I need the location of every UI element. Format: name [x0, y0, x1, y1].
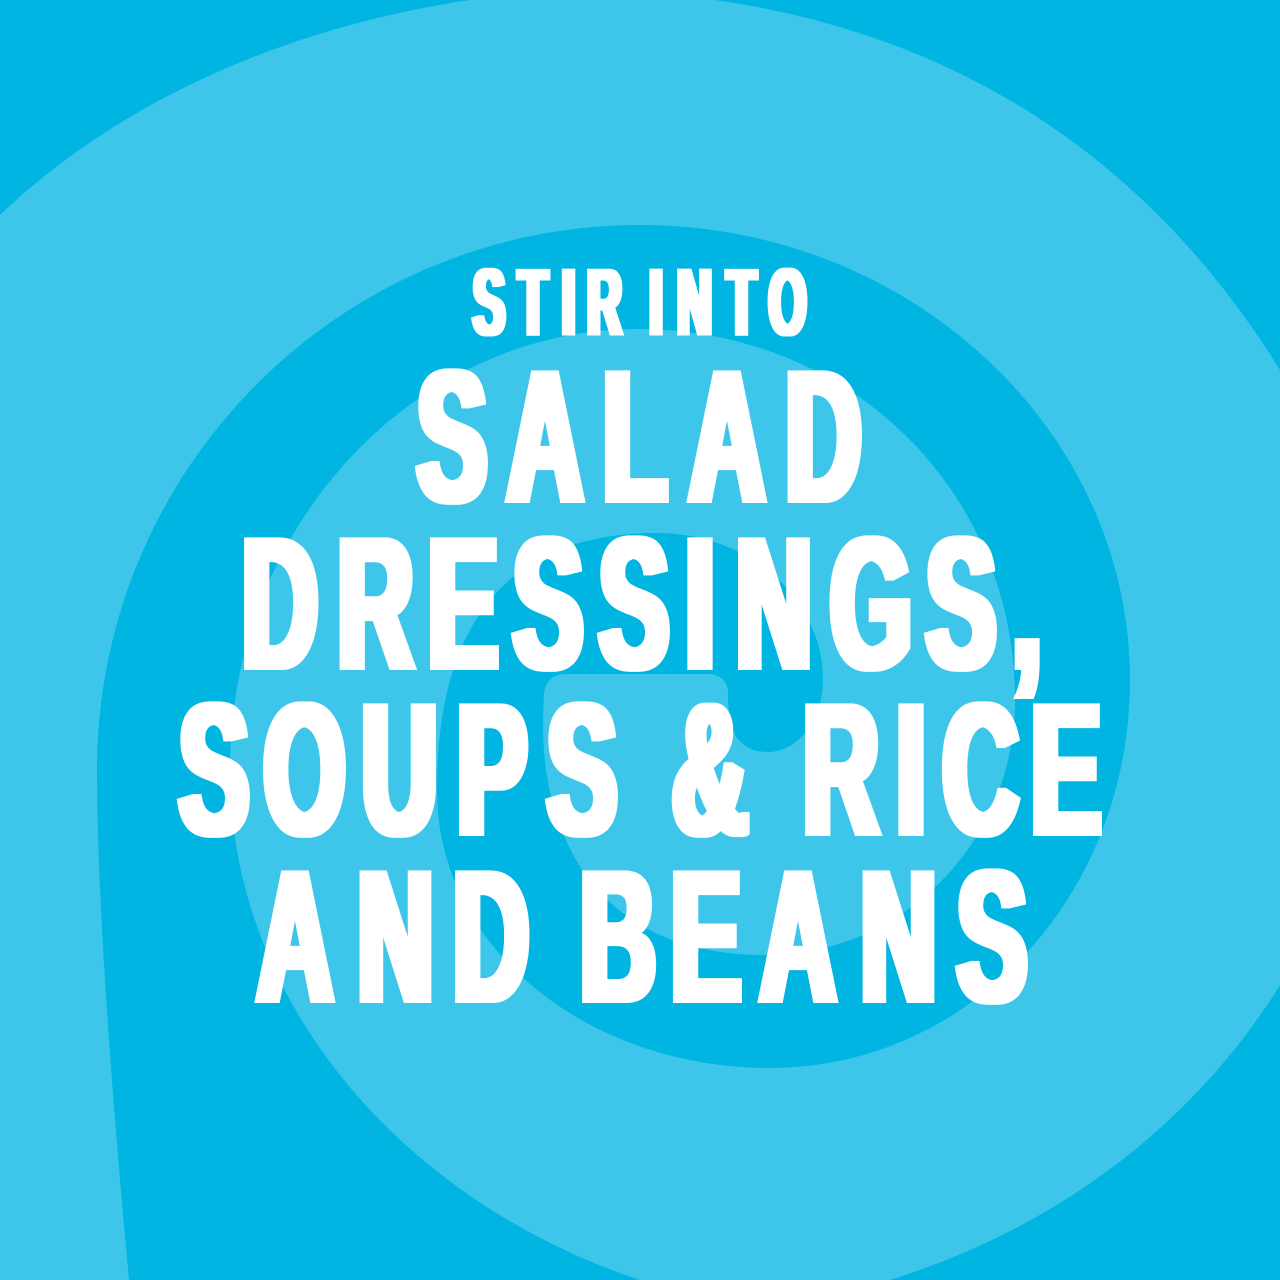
headline	[179, 333, 1101, 1042]
headline line 1: SALAD	[417, 333, 861, 542]
headline line 2: DRESSINGS,	[242, 500, 1042, 709]
headline line 4: AND BEANS	[257, 833, 1027, 1042]
intro line: STIR INTO	[473, 249, 806, 357]
headline line 3: SOUPS & RICE	[179, 666, 1101, 875]
